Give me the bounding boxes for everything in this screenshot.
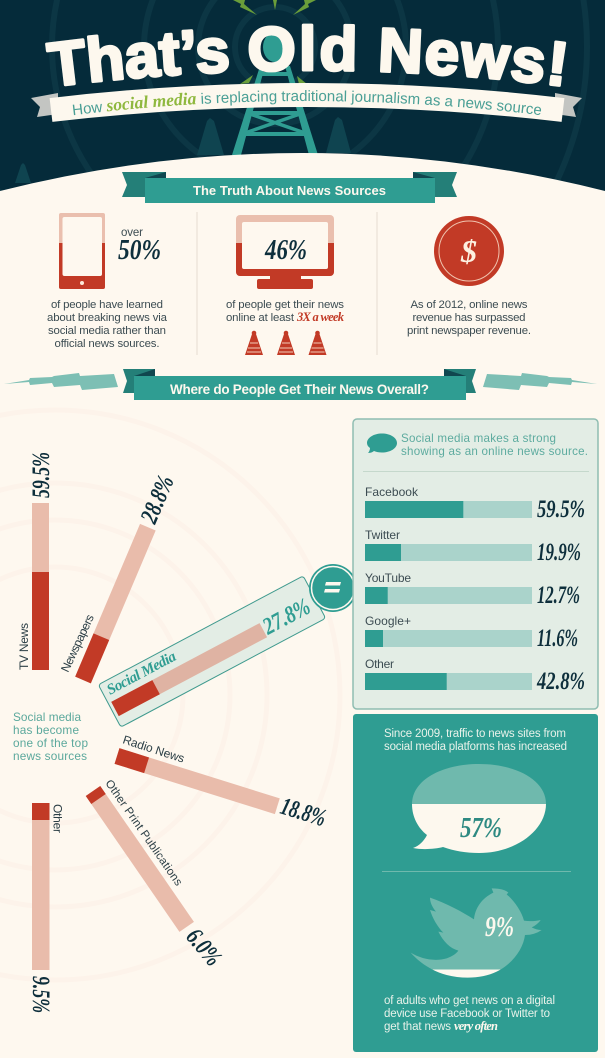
value: 28.8% bbox=[135, 472, 180, 528]
value: 18.8% bbox=[277, 793, 329, 832]
description bbox=[407, 299, 531, 337]
description: official news sources. bbox=[54, 338, 160, 350]
icon: speech bubble bbox=[367, 434, 397, 453]
chart: Other Print Publications bar bbox=[86, 778, 227, 971]
row: Facebook: 59.5% bbox=[537, 496, 585, 523]
chart: Other bar bbox=[27, 803, 64, 1013]
stat: 46% bbox=[226, 215, 345, 355]
chart: Social Media highlighted bar bbox=[98, 576, 326, 727]
row: YouTube: YouTube bbox=[365, 571, 411, 585]
row: Facebook bbox=[365, 485, 585, 523]
row: Twitter bbox=[365, 528, 581, 566]
stat: over 50% bbox=[47, 213, 168, 350]
label: Social Media bbox=[104, 648, 179, 699]
description: of people get their news bbox=[226, 299, 344, 311]
label: Radio News bbox=[121, 733, 186, 766]
value: 27.8% bbox=[258, 594, 315, 641]
adults text: of adults who get news on a digital bbox=[384, 995, 555, 1007]
subtitle ribbon bbox=[31, 83, 582, 122]
note: social media top source: one of the top bbox=[13, 736, 88, 750]
description: of people have learned bbox=[51, 299, 163, 311]
ribbon: The Truth About News Sources bbox=[122, 172, 457, 203]
row: Google+: Google+ bbox=[365, 614, 411, 628]
value: 6.0% bbox=[180, 924, 227, 971]
row: Facebook: Facebook bbox=[365, 485, 419, 499]
adults text: very often bbox=[454, 1019, 498, 1033]
label: Other Print Publications bbox=[103, 778, 184, 889]
panel: online news sources bbox=[353, 419, 598, 709]
icon: 57% speech bubble bbox=[412, 764, 546, 853]
9% figure: 9% bbox=[485, 912, 514, 943]
subtitle text: How social media is replacing traditional journalism as a news source bbox=[72, 90, 542, 116]
row: Google+: 11.6% bbox=[537, 625, 578, 652]
row: Twitter: 19.9% bbox=[537, 539, 581, 566]
description: 3X a week bbox=[296, 310, 345, 324]
hill bbox=[0, 153, 605, 300]
row: Google+ bbox=[365, 614, 578, 652]
value: 9.5% bbox=[27, 976, 54, 1013]
value: 59.5% bbox=[28, 452, 55, 498]
label: Newspapers bbox=[58, 612, 97, 674]
adults text: get that news bbox=[384, 1021, 451, 1033]
label: Other bbox=[50, 804, 64, 833]
row: Other: 42.8% bbox=[536, 668, 585, 695]
adults text bbox=[384, 995, 555, 1033]
description: print newspaper revenue. bbox=[407, 325, 531, 337]
57% figure: 57% bbox=[460, 813, 502, 844]
description: social media rather than bbox=[48, 325, 166, 337]
note: social media top source: has become bbox=[13, 723, 79, 737]
row: Other: Other bbox=[365, 657, 394, 671]
chart: TV News bar bbox=[17, 452, 55, 670]
over label: over bbox=[121, 227, 143, 239]
icon: monitor bbox=[236, 215, 334, 289]
label: TV News bbox=[17, 623, 31, 670]
icon: small background towers bbox=[15, 117, 351, 183]
icon: three red towers bbox=[245, 331, 326, 355]
icon: lightning bolts bbox=[233, 0, 316, 84]
ribbon heading: The Truth About News Sources bbox=[193, 183, 386, 198]
description bbox=[226, 299, 345, 324]
traffic text: social media platforms has increased bbox=[384, 741, 567, 753]
note: social media top source: Social media bbox=[13, 710, 81, 724]
row: YouTube bbox=[365, 571, 580, 609]
title: That’s Old News! bbox=[45, 24, 566, 87]
description: As of 2012, online news bbox=[410, 299, 528, 311]
description bbox=[47, 299, 168, 350]
icon: phone bbox=[59, 213, 105, 289]
traffic text bbox=[384, 728, 567, 753]
description: revenue has surpassed bbox=[412, 312, 526, 324]
row: Other bbox=[365, 657, 585, 695]
panel: traffic and adults stats bbox=[353, 714, 598, 1052]
icon: dollar coin: $ bbox=[460, 233, 477, 269]
icon: equals badge bbox=[309, 564, 357, 612]
panel intro text bbox=[401, 432, 588, 458]
chart: Newspapers bar bbox=[58, 472, 180, 683]
chart: Radio News bar bbox=[115, 733, 329, 832]
icon: right lightning bbox=[483, 373, 597, 390]
description: about breaking news via bbox=[47, 312, 168, 324]
ribbon: Where do People Get Their News Overall? bbox=[123, 369, 476, 400]
header background bbox=[0, 0, 605, 191]
icon: left lightning bbox=[4, 373, 118, 390]
note: social media top source: news sources bbox=[13, 749, 87, 763]
note: social media top source bbox=[13, 710, 88, 763]
icon: bird 9% bbox=[411, 888, 542, 978]
description: online at least bbox=[226, 312, 295, 324]
ribbon heading: Where do People Get Their News Overall? bbox=[170, 382, 429, 397]
row: Twitter: Twitter bbox=[365, 528, 400, 542]
traffic text: Since 2009, traffic to news sites from bbox=[384, 728, 566, 740]
lower background rings bbox=[0, 410, 340, 980]
row: YouTube: 12.7% bbox=[537, 582, 580, 609]
50% figure: 50% bbox=[118, 235, 161, 266]
46% figure: 46% bbox=[264, 235, 307, 266]
adults text: device use Facebook or Twitter to bbox=[384, 1008, 550, 1020]
panel intro text: Social media makes a strong bbox=[401, 432, 556, 445]
panel intro text: showing as an online news source. bbox=[401, 445, 588, 458]
icon: radio tower bbox=[232, 32, 318, 155]
stat: online revenue bbox=[407, 216, 531, 337]
